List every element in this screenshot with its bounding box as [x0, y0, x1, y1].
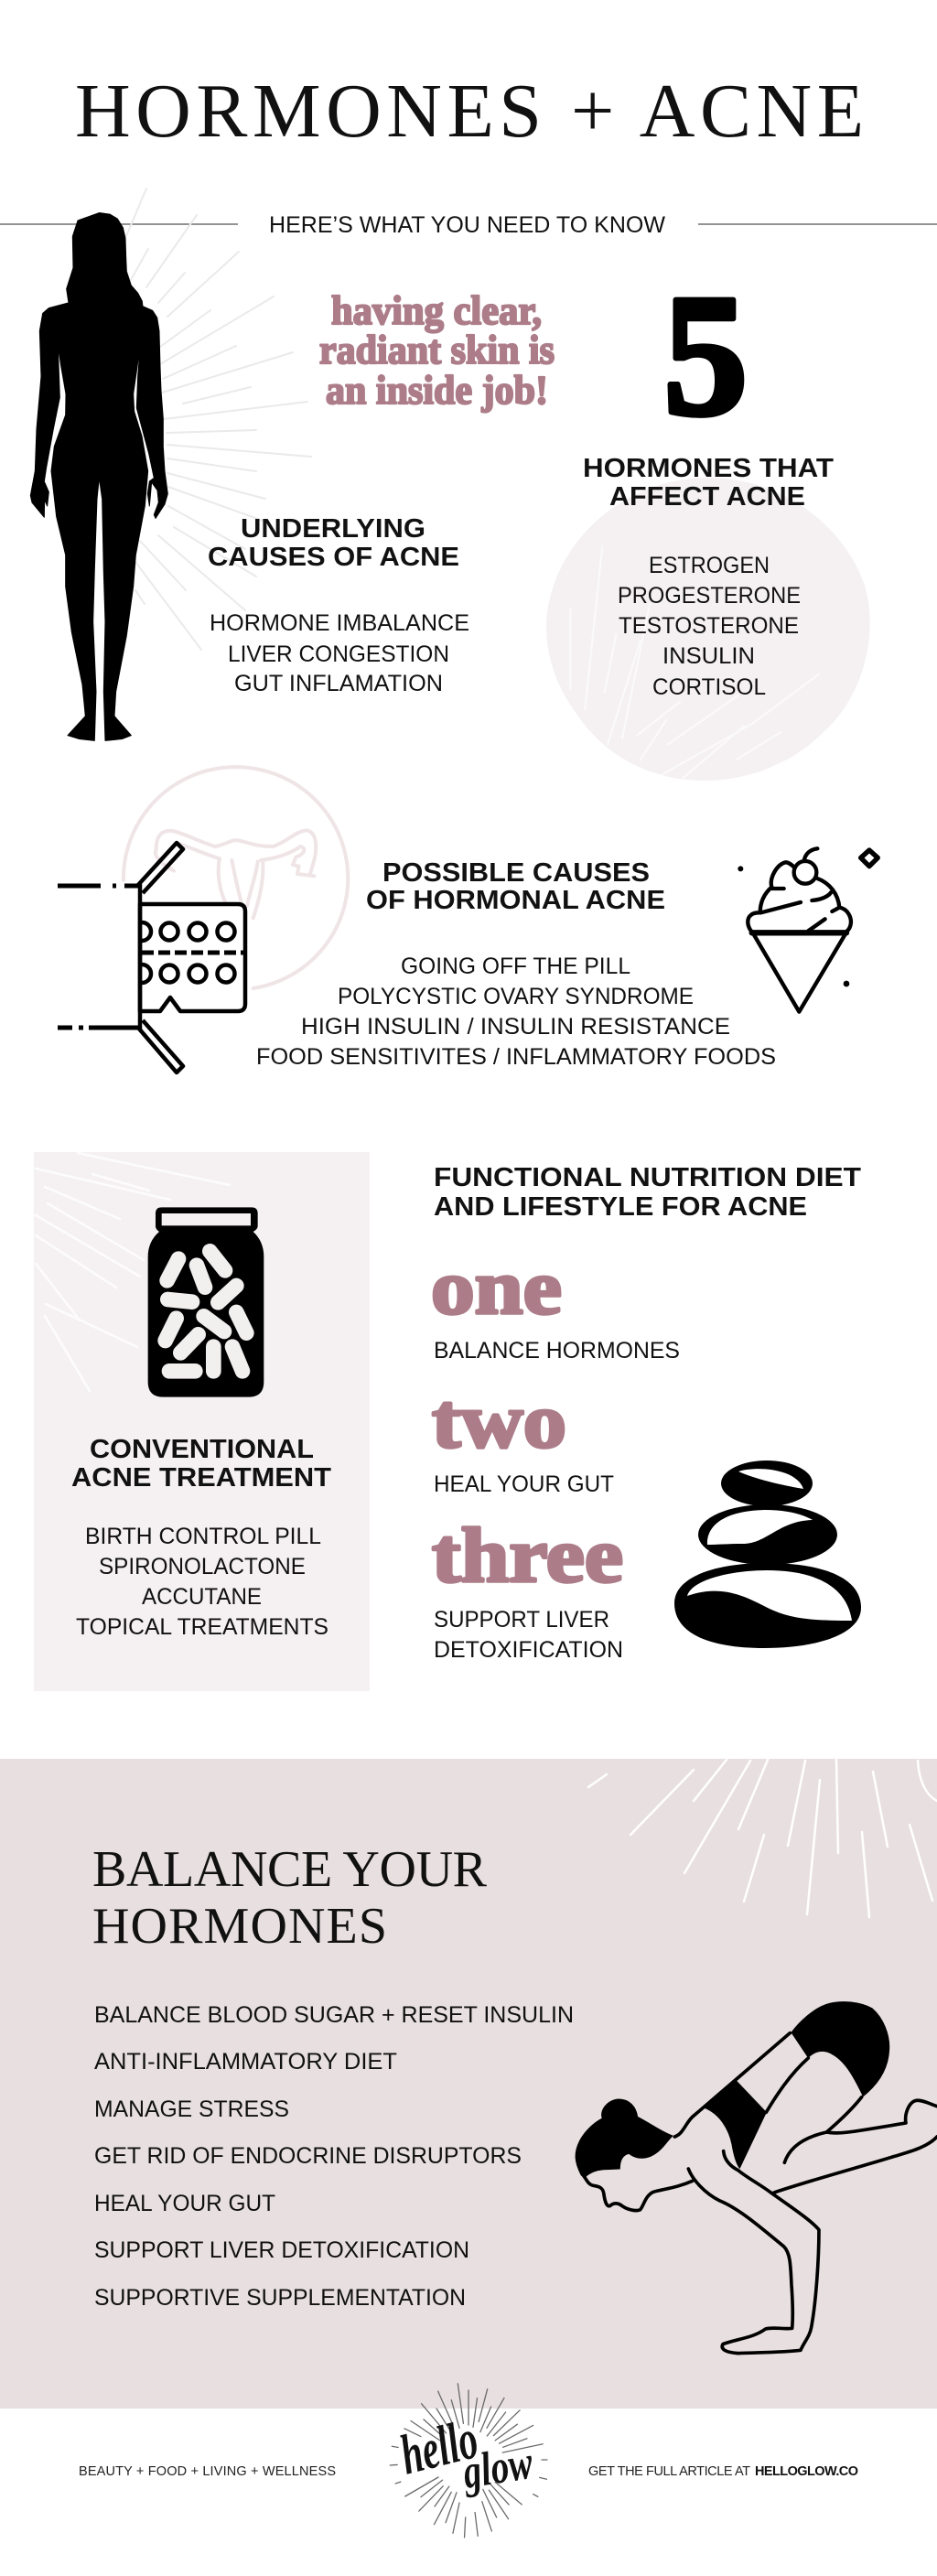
balance list: MANAGE STRESS — [94, 2096, 289, 2122]
logo: hello glow: glow — [458, 2437, 536, 2499]
balance list: SUPPORTIVE SUPPLEMENTATION — [94, 2285, 466, 2311]
possible causes heading — [366, 858, 665, 915]
functional nutrition heading — [434, 1163, 861, 1222]
step one — [431, 1245, 680, 1363]
tagline: an inside job! — [326, 368, 548, 413]
step one: one — [431, 1245, 562, 1331]
icon: stacked stones — [674, 1460, 861, 1648]
icon: uterus outline in circle — [124, 767, 348, 988]
footer article link: GET THE FULL ARTICLE AT — [588, 2464, 750, 2479]
balance heading: BALANCE YOUR — [92, 1841, 488, 1898]
balance list — [94, 2002, 574, 2311]
icon: woman silhouette — [30, 213, 167, 740]
conventional treatment list: SPIRONOLACTONE — [99, 1554, 306, 1579]
logo: hello glow — [390, 2384, 547, 2538]
conventional treatment list: TOPICAL TREATMENTS — [76, 1614, 328, 1640]
hormones list: TESTOSTERONE — [619, 613, 799, 639]
possible causes list: HIGH INSULIN / INSULIN RESISTANCE — [301, 1014, 730, 1040]
balance list: GET RID OF ENDOCRINE DISRUPTORS — [94, 2143, 522, 2169]
possible causes list — [256, 954, 776, 1070]
step three — [432, 1513, 623, 1663]
balance heading — [92, 1841, 488, 1955]
functional nutrition heading: AND LIFESTYLE FOR ACNE — [434, 1192, 807, 1222]
tagline: radiant skin is — [319, 328, 555, 372]
hormones heading: HORMONES THAT — [583, 454, 834, 483]
conventional treatment list: BIRTH CONTROL PILL — [85, 1524, 321, 1549]
underlying causes list: HORMONE IMBALANCE — [210, 610, 469, 636]
subtitle with rules: HERE’S WHAT YOU NEED TO KNOW — [269, 212, 665, 238]
possible causes list: POLYCYSTIC OVARY SYNDROME — [338, 984, 694, 1009]
icon: birth control pill pack — [58, 843, 245, 1072]
panel: conventional treatment — [34, 1152, 370, 1691]
underlying causes heading: CAUSES OF ACNE — [208, 543, 459, 572]
underlying causes list — [210, 610, 469, 696]
hormones list — [618, 553, 801, 700]
icon: ice cream cone — [738, 848, 878, 1012]
rays behind silhouette — [126, 189, 311, 650]
underlying causes list: GUT INFLAMATION — [234, 671, 443, 696]
hormones heading — [583, 454, 834, 512]
step two — [432, 1378, 614, 1497]
balance heading: HORMONES — [92, 1898, 387, 1955]
hormones list: INSULIN — [662, 643, 755, 669]
title: HORMONES + ACNE — [75, 69, 864, 154]
underlying causes heading: UNDERLYING — [241, 514, 425, 544]
step three: DETOXIFICATION — [434, 1637, 623, 1663]
step one: BALANCE HORMONES — [434, 1338, 680, 1363]
tagline — [319, 288, 555, 413]
step two: two — [432, 1378, 566, 1464]
logo: hello glow: hello — [394, 2408, 484, 2487]
step three: SUPPORT LIVER — [434, 1607, 609, 1633]
balance list: HEAL YOUR GUT — [94, 2191, 275, 2216]
step three: three — [432, 1513, 623, 1599]
icon: yoga figure — [576, 2002, 937, 2354]
panel: balance your hormones — [0, 1759, 937, 2409]
step two: HEAL YOUR GUT — [434, 1471, 614, 1497]
underlying causes heading — [208, 514, 459, 572]
icon: pill jar — [148, 1207, 264, 1397]
balance list: SUPPORT LIVER DETOXIFICATION — [94, 2237, 469, 2263]
hormones list: ESTROGEN — [649, 553, 770, 578]
footer tagline: BEAUTY + FOOD + LIVING + WELLNESS — [79, 2464, 336, 2479]
footer article link: HELLOGLOW.CO — [755, 2464, 858, 2479]
conventional treatment heading — [71, 1435, 331, 1493]
balance list: ANTI-INFLAMMATORY DIET — [94, 2049, 397, 2075]
possible causes list: FOOD SENSITIVITES / INFLAMMATORY FOODS — [256, 1044, 776, 1070]
conventional treatment list: ACCUTANE — [142, 1584, 262, 1610]
hormones list: CORTISOL — [652, 674, 766, 700]
possible causes heading: POSSIBLE CAUSES — [382, 858, 650, 888]
conventional treatment heading: CONVENTIONAL — [90, 1435, 314, 1464]
blob behind hormones — [546, 478, 870, 781]
balance list: BALANCE BLOOD SUGAR + RESET INSULIN — [94, 2002, 574, 2028]
possible causes list: GOING OFF THE PILL — [401, 954, 630, 979]
possible causes heading: OF HORMONAL ACNE — [366, 886, 665, 915]
conventional treatment list — [76, 1524, 328, 1640]
footer article link — [588, 2464, 858, 2479]
underlying causes list: LIVER CONGESTION — [228, 641, 449, 667]
tagline: having clear, — [331, 288, 542, 333]
hormones list: PROGESTERONE — [618, 583, 801, 609]
functional nutrition heading: FUNCTIONAL NUTRITION DIET — [434, 1163, 861, 1192]
hormones heading: AFFECT ACNE — [609, 482, 805, 512]
conventional treatment heading: ACNE TREATMENT — [71, 1463, 331, 1493]
big number 5: 5 — [663, 259, 748, 452]
